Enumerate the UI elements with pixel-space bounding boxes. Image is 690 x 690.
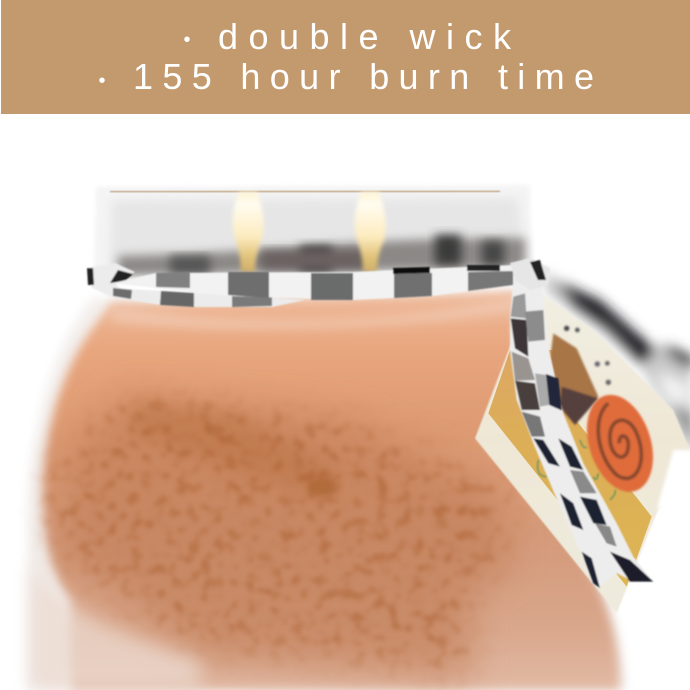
text: double wick: double wick — [218, 16, 512, 57]
gingham ribbon — [87, 258, 550, 307]
icon: cinnamon roll — [575, 386, 665, 500]
text: burn time: 155 hour burn time — [133, 56, 594, 97]
ribbon tail — [510, 263, 653, 588]
glass jar neck — [94, 185, 532, 276]
bullet: burn time: • — [98, 70, 106, 92]
flame right — [355, 192, 386, 272]
banner — [1, 0, 690, 114]
banner text — [98, 16, 594, 97]
bullet: double wick: • — [183, 29, 191, 51]
glass jar body — [28, 290, 626, 690]
flame left — [233, 192, 264, 272]
candle wax body — [30, 292, 620, 690]
hang tag — [475, 293, 690, 613]
icon: muffin — [550, 326, 611, 425]
blurred ribbon end — [543, 270, 690, 457]
